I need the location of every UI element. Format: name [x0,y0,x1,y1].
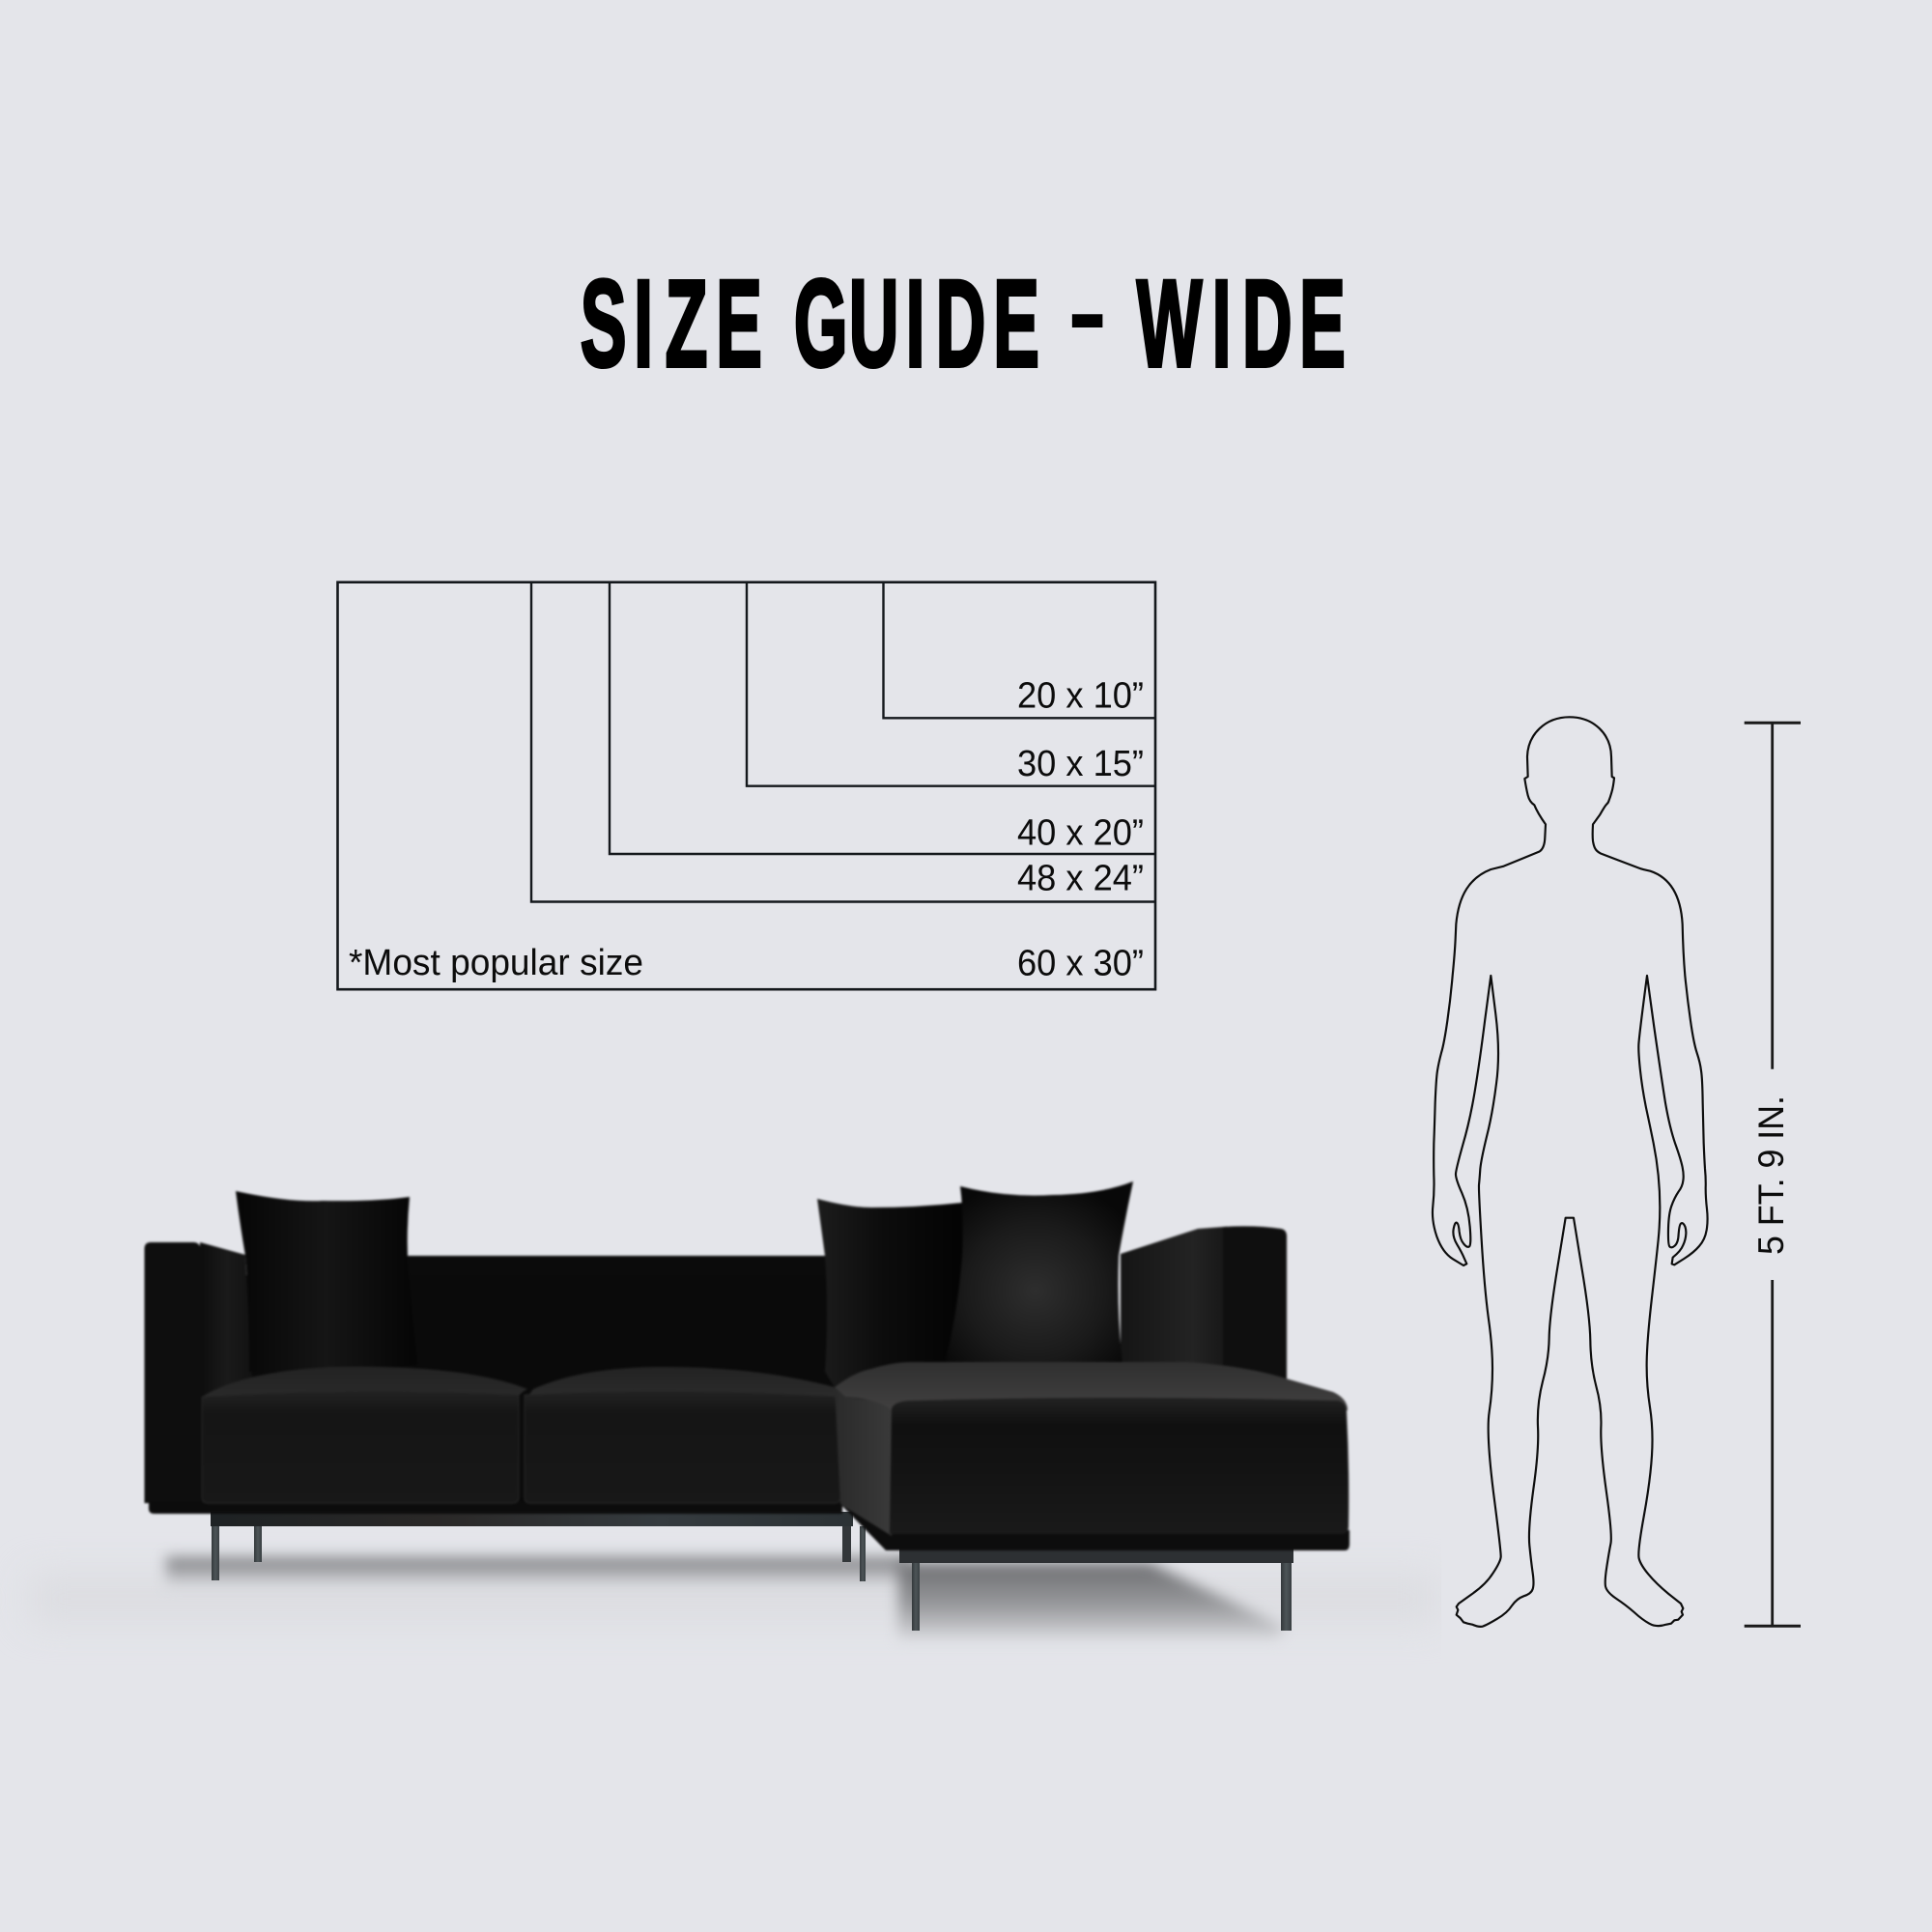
label: 60 x 30: 60 x 30” [1017,943,1144,983]
left arm [145,1242,253,1503]
label: 30 x 15: 30 x 15” [1017,744,1144,784]
label: most popular size: *Most popular size [349,943,643,983]
right arm [1121,1226,1287,1381]
upholstered body [145,1181,1350,1550]
seat cushion centre [525,1367,842,1503]
backrest [406,1256,831,1391]
top cap [1745,722,1801,724]
height label: 5 FT. 9 IN. [1750,1095,1791,1255]
base plate [149,1502,842,1514]
bottom cap [1745,1625,1801,1628]
title [581,250,1346,392]
lower frame rails [211,1512,1293,1563]
frame: 60 x 30 [338,582,1155,989]
title: WIDE [1137,254,1346,392]
title: - [1067,250,1107,374]
size guide infographic canvas [143,277,1801,1642]
sofa illustration [143,1180,1351,1642]
label: 20 x 10: 20 x 10” [1017,676,1144,717]
front pillow [945,1181,1133,1364]
upper line [1771,723,1774,1069]
label: 48 x 24: 48 x 24” [1017,858,1144,898]
middle pillow [817,1199,966,1387]
frame: 40 x 20 [610,582,1155,854]
human silhouette for scale [1433,717,1708,1627]
frame: 20 x 10 [883,582,1155,718]
size chart: nested wide canvas sizes [338,582,1155,989]
left pillow [236,1191,417,1372]
label: 40 x 20: 40 x 20” [1017,813,1144,854]
legs [212,1524,1292,1631]
chaise front [890,1398,1349,1534]
seat cushion left [202,1367,527,1503]
frame: 48 x 24 [531,582,1155,902]
chaise top [835,1362,1348,1410]
chaise side face [835,1387,894,1536]
chaise base [840,1504,1350,1550]
dark backing behind cushions [201,1275,966,1503]
frame: 30 x 15 [747,582,1155,786]
title: SIZE GUIDE [581,254,1039,392]
floor shadow [29,1557,1439,1638]
lower line [1771,1280,1774,1626]
